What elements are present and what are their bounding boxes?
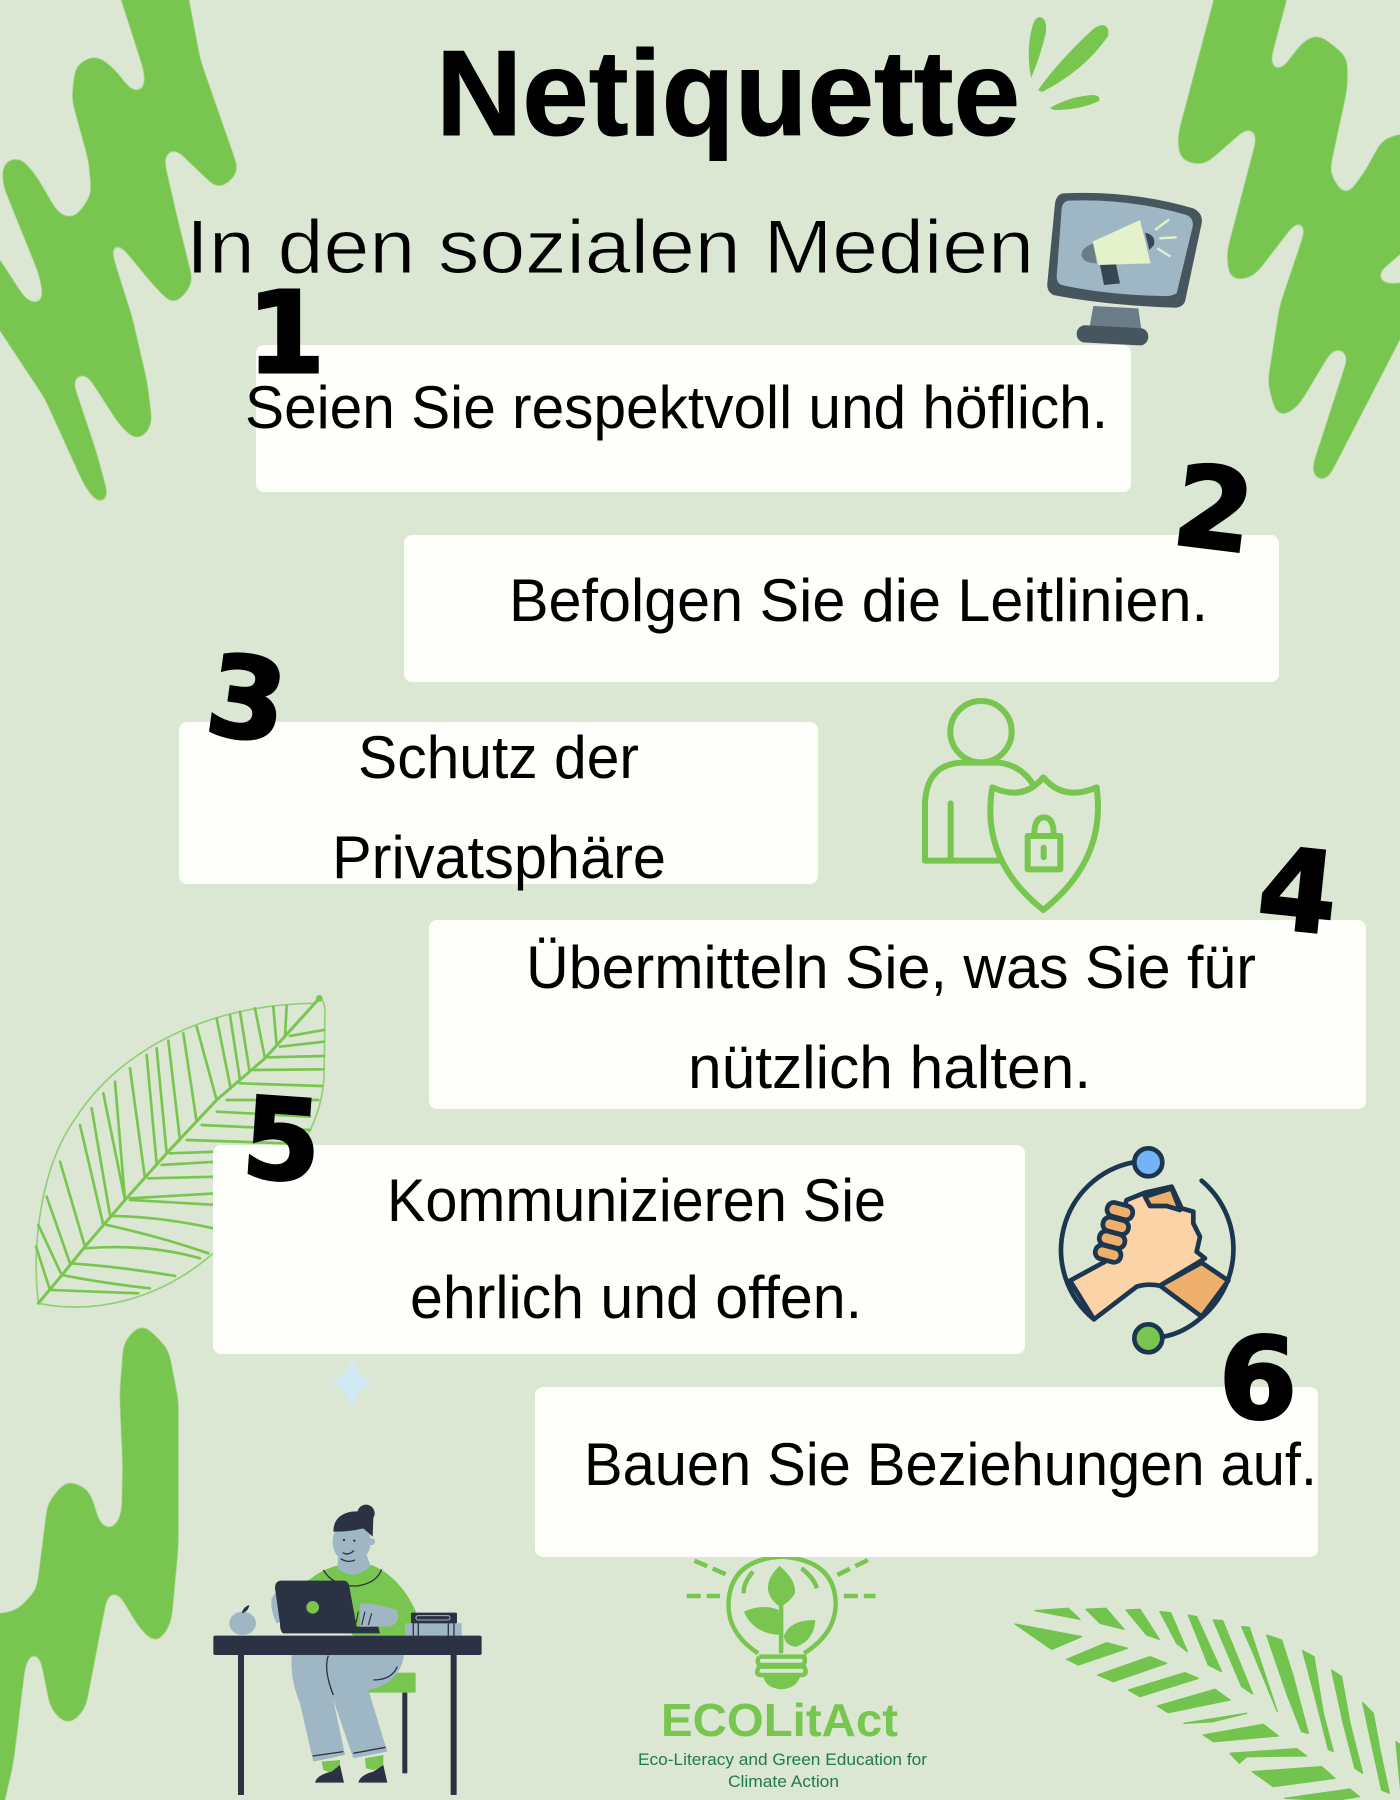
rule 3 number: 3 bbox=[199, 630, 294, 770]
panel: rule 3 card bbox=[179, 722, 818, 884]
panel: rule 1 card bbox=[256, 345, 1131, 492]
panel: rule 6 card bbox=[535, 1387, 1318, 1557]
panel: rule 2 card bbox=[404, 535, 1279, 682]
logo: light bulb with plant bbox=[687, 1557, 876, 1689]
rule 1 number: 1 bbox=[247, 269, 325, 399]
outlined leaf illustration bbox=[36, 995, 325, 1307]
logo tagline bbox=[638, 1750, 927, 1791]
rule 5 number: 5 bbox=[238, 1073, 325, 1209]
rule 5 text bbox=[387, 1167, 886, 1331]
decorative blob: top left bbox=[0, 0, 239, 506]
icon: handshake bbox=[1061, 1148, 1233, 1352]
rule 4 text bbox=[526, 934, 1256, 1101]
logo tagline: Eco-Literacy and Green Education for bbox=[638, 1750, 927, 1769]
rule 4 text: Übermitteln Sie, was Sie für bbox=[526, 934, 1256, 1001]
logo tagline: Climate Action bbox=[728, 1772, 839, 1791]
subtitle: In den sozialen Medien bbox=[186, 205, 1034, 290]
decorative blob: bottom left bbox=[0, 1323, 178, 1800]
decorative blob: top right bbox=[1178, 0, 1400, 482]
logo wordmark: ECOLitAct bbox=[661, 1694, 898, 1746]
rule 1 text: Seien Sie respektvoll und höflich. bbox=[245, 374, 1108, 441]
panel: rule 5 card bbox=[213, 1145, 1025, 1354]
rule 4 text: nützlich halten. bbox=[688, 1034, 1091, 1101]
rule 5 text: ehrlich und offen. bbox=[410, 1264, 862, 1331]
rule 3 text bbox=[332, 724, 666, 891]
rule 3 text: Privatsphäre bbox=[332, 824, 666, 891]
icon: monitor with megaphone bbox=[1047, 193, 1202, 346]
illustration: woman working at desk with laptop bbox=[213, 1505, 482, 1795]
decorative palm leaf: bottom right bbox=[1015, 1608, 1400, 1800]
rule 4 number: 4 bbox=[1252, 823, 1343, 961]
icon: sparkle star bbox=[328, 1354, 375, 1413]
title: Netiquette bbox=[436, 25, 1020, 161]
rule 2 number: 2 bbox=[1167, 441, 1260, 579]
icon: green splash accent bbox=[1029, 17, 1108, 110]
rule 3 text: Schutz der bbox=[358, 724, 639, 791]
panel: rule 4 card bbox=[429, 920, 1366, 1109]
rule 6 text: Bauen Sie Beziehungen auf. bbox=[584, 1431, 1317, 1498]
icon: person with shield and lock bbox=[925, 701, 1098, 910]
rule 2 text: Befolgen Sie die Leitlinien. bbox=[509, 567, 1208, 634]
rule 5 text: Kommunizieren Sie bbox=[387, 1167, 886, 1234]
rule 6 number: 6 bbox=[1219, 1315, 1297, 1445]
